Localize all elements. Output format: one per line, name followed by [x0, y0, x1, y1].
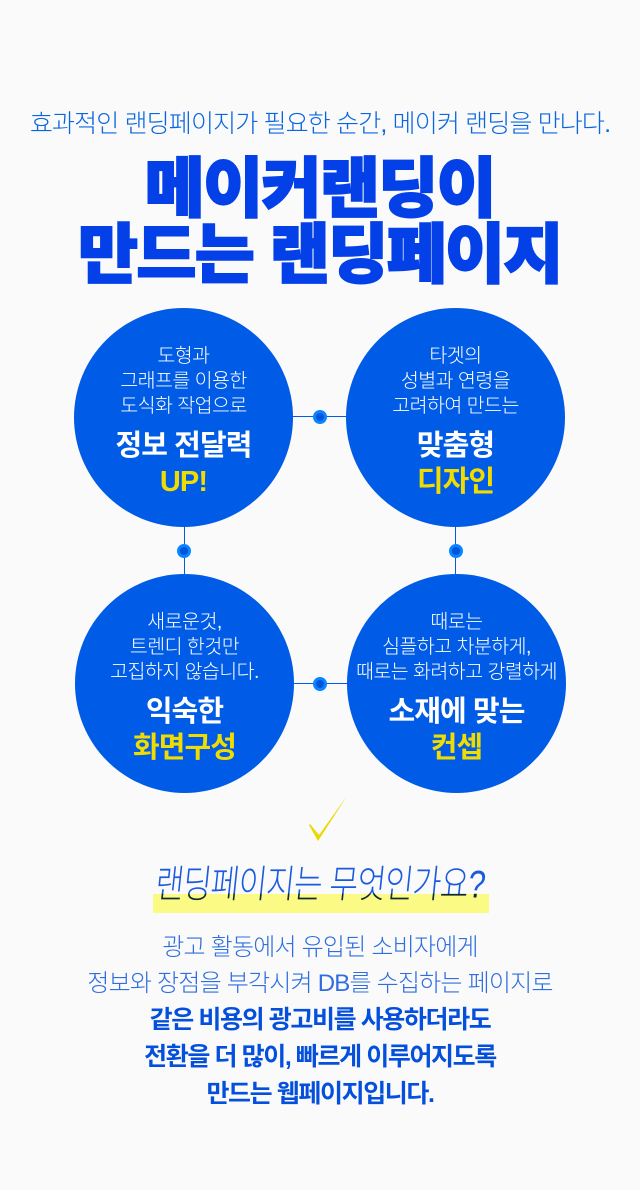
circle heading: UP!	[160, 466, 207, 498]
body text: 광고 활동에서 유입된 소비자에게	[162, 934, 478, 961]
circle heading: 익숙한	[146, 696, 223, 728]
body text	[87, 934, 553, 1108]
body text: 정보와 장점을 부각시켜 DB를 수집하는 페이지로	[87, 970, 553, 997]
circle description: 때로는	[430, 611, 483, 633]
connector line: top	[290, 416, 350, 417]
circle description: 도식화 작업으로	[120, 395, 247, 417]
circle heading: 정보 전달력	[115, 430, 252, 462]
highlight bar	[153, 894, 489, 913]
handwritten question heading: 랜딩페이지는 무엇인가요?	[153, 862, 487, 906]
circle description: 성별과 연령을	[401, 370, 510, 392]
circle heading: 컨셉	[431, 732, 482, 764]
circle heading	[417, 430, 494, 498]
connector line: bottom	[290, 683, 350, 684]
circle description: 그래프를 이용한	[120, 370, 247, 392]
circle heading	[388, 696, 525, 764]
body text: 만드는 웹페이지입니다.	[206, 1080, 434, 1108]
circle description	[110, 611, 259, 683]
circle heading: 소재에 맞는	[388, 696, 525, 728]
circle description: 고집하지 않습니다.	[110, 661, 259, 683]
panel: information delivery circle	[74, 308, 293, 527]
circle description: 때로는 화려하고 강렬하게	[356, 661, 557, 683]
circle description: 타겟의	[429, 345, 482, 367]
panel: material concept circle	[347, 574, 566, 793]
connector dot: bottom	[313, 677, 327, 691]
circle heading	[133, 696, 236, 764]
icon: check mark	[309, 796, 347, 841]
title: 만드는 랜딩페이지	[78, 218, 562, 291]
connector dot: right	[449, 544, 463, 558]
title: 메이커랜딩이	[145, 152, 495, 225]
circle description	[120, 345, 247, 417]
body text: 전환을 더 많이, 빠르게 이루어지도록	[144, 1043, 496, 1071]
panel: familiar layout circle	[75, 574, 294, 793]
circle description: 심플하고 차분하게,	[382, 636, 531, 658]
connector line: left	[184, 525, 185, 577]
circle description	[392, 345, 519, 417]
circle heading: 디자인	[417, 466, 494, 498]
circle heading: 화면구성	[133, 732, 236, 764]
panel: custom design circle	[346, 308, 565, 527]
circle heading: 맞춤형	[417, 430, 494, 462]
connector dot: top	[313, 410, 327, 424]
body text: 같은 비용의 광고비를 사용하더라도	[150, 1006, 490, 1034]
circle heading	[115, 430, 252, 498]
title	[78, 152, 562, 291]
circle description: 새로운것,	[147, 611, 222, 633]
handwritten question heading	[0, 854, 640, 916]
circle description	[356, 611, 557, 683]
circle description: 고려하여 만드는	[392, 395, 519, 417]
connector dot: left	[177, 544, 191, 558]
circle description: 도형과	[157, 345, 210, 367]
connector line: right	[455, 525, 456, 577]
circle description: 트렌디 한것만	[130, 636, 239, 658]
subtitle: 효과적인 랜딩페이지가 필요한 순간, 메이커 랜딩을 만나다.	[30, 110, 610, 138]
